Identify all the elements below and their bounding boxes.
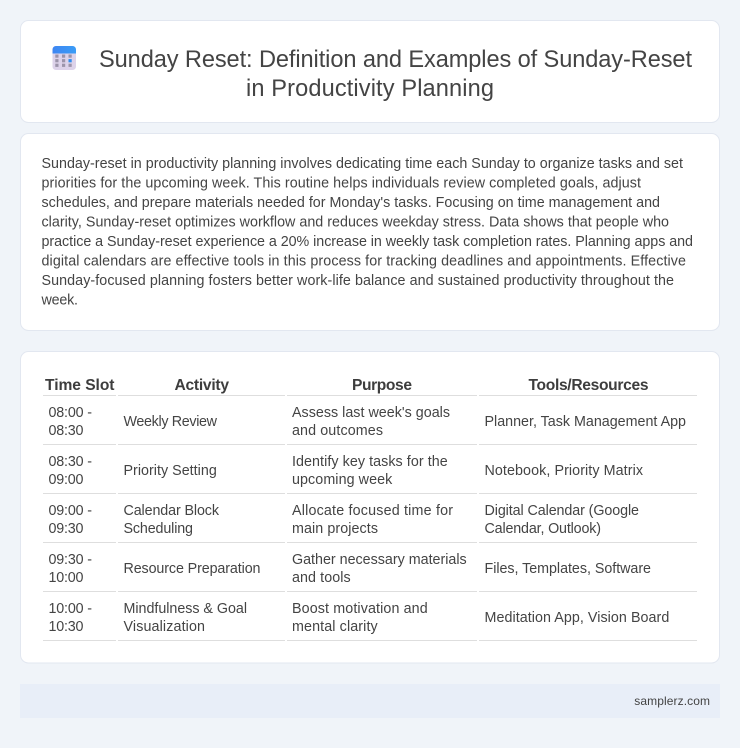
row: resource preparation: and tools [292,570,351,586]
panel: schedule table [20,352,720,663]
table header: Tools/Resources [528,377,649,394]
footer [20,684,720,718]
row: priority setting: Notebook, Priority Matrix [484,463,643,479]
row: mindfulness and goal visualization: Mindfulness & Goal [124,601,247,617]
title: Sunday Reset: Definition and Examples of Sunday-Reset [99,47,692,73]
row: resource preparation: Gather necessary materials [292,552,467,568]
row: calendar block scheduling: 09:30 [48,521,84,537]
row: calendar block scheduling: Calendar Block [124,503,220,519]
text block: description paragraph: priorities for the upcoming week. This routine helps individuals review completed goals, adjust [42,176,641,192]
table header: Time Slot [45,377,114,394]
text block: description paragraph: Sunday-focused planning fosters better work-life balance and sustained productivity throughout the [42,273,674,289]
text block: description paragraph: digital calendars are effective tools in this process for tracking deadlines and appointments. Effective [42,254,686,270]
icon: calendar [52,46,76,70]
row: weekly review: Assess last week's goals [292,405,450,421]
row: weekly review [48,405,686,439]
row: weekly review: Planner, Task Management App [484,414,686,430]
row: resource preparation: 10:00 [48,570,84,586]
row: mindfulness and goal visualization: 10:30 [48,619,84,635]
text block: description paragraph: schedules, and prepare materials needed for Monday's tasks. Focusing on time management and [42,195,660,211]
row: resource preparation [48,552,651,586]
row: resource preparation: 09:30 - [48,552,92,568]
row: calendar block scheduling: Calendar, Outlook) [484,521,601,537]
text block: description paragraph: practice a Sunday-reset experience a 20% increase in weekly task completion rates. Planning apps and [42,234,693,250]
row: priority setting: Priority Setting [124,463,217,479]
table header [45,377,649,394]
text block: description paragraph: week. [40,292,78,308]
row: calendar block scheduling [48,503,639,537]
row: weekly review: and outcomes [292,423,383,439]
table header: Purpose [352,377,412,394]
row: weekly review: 08:00 - [48,405,92,421]
row: weekly review: 08:30 [48,423,84,439]
row: calendar block scheduling: Digital Calendar (Google [484,503,639,519]
text block: description paragraph: Sunday-reset in productivity planning involves dedicating time each Sunday to organize tasks and set [42,156,683,172]
row: priority setting: 09:00 [48,472,84,488]
row: priority setting [48,454,643,488]
table header: Activity [174,377,229,394]
row: weekly review: Weekly Review [124,414,218,430]
row: priority setting: 08:30 - [48,454,92,470]
row: mindfulness and goal visualization: 10:00 - [48,601,92,617]
title: in Productivity Planning [246,76,494,102]
row: mindfulness and goal visualization: Boost motivation and [292,601,428,617]
footer: samplerz.com [634,694,710,708]
row: mindfulness and goal visualization: mental clarity [292,619,379,635]
row: resource preparation: Resource Preparation [124,561,261,577]
row: priority setting: upcoming week [292,472,393,488]
row: mindfulness and goal visualization: Meditation App, Vision Board [484,610,669,626]
row: priority setting: Identify key tasks for the [292,454,448,470]
panel: title card [20,20,720,122]
text block: description paragraph: clarity, Sunday-reset optimizes workflow and reduces weekday stress. Data shows that people who [42,214,669,230]
panel: description [20,134,720,330]
row: resource preparation: Files, Templates, Software [484,561,651,577]
row: calendar block scheduling: 09:00 - [48,503,92,519]
text block: description paragraph [40,156,693,308]
title [99,47,692,102]
row: calendar block scheduling: main projects [292,521,378,537]
row: mindfulness and goal visualization [48,601,669,635]
row: mindfulness and goal visualization: Visualization [124,619,205,635]
row: calendar block scheduling: Allocate focused time for [292,503,453,519]
row: calendar block scheduling: Scheduling [124,521,193,537]
